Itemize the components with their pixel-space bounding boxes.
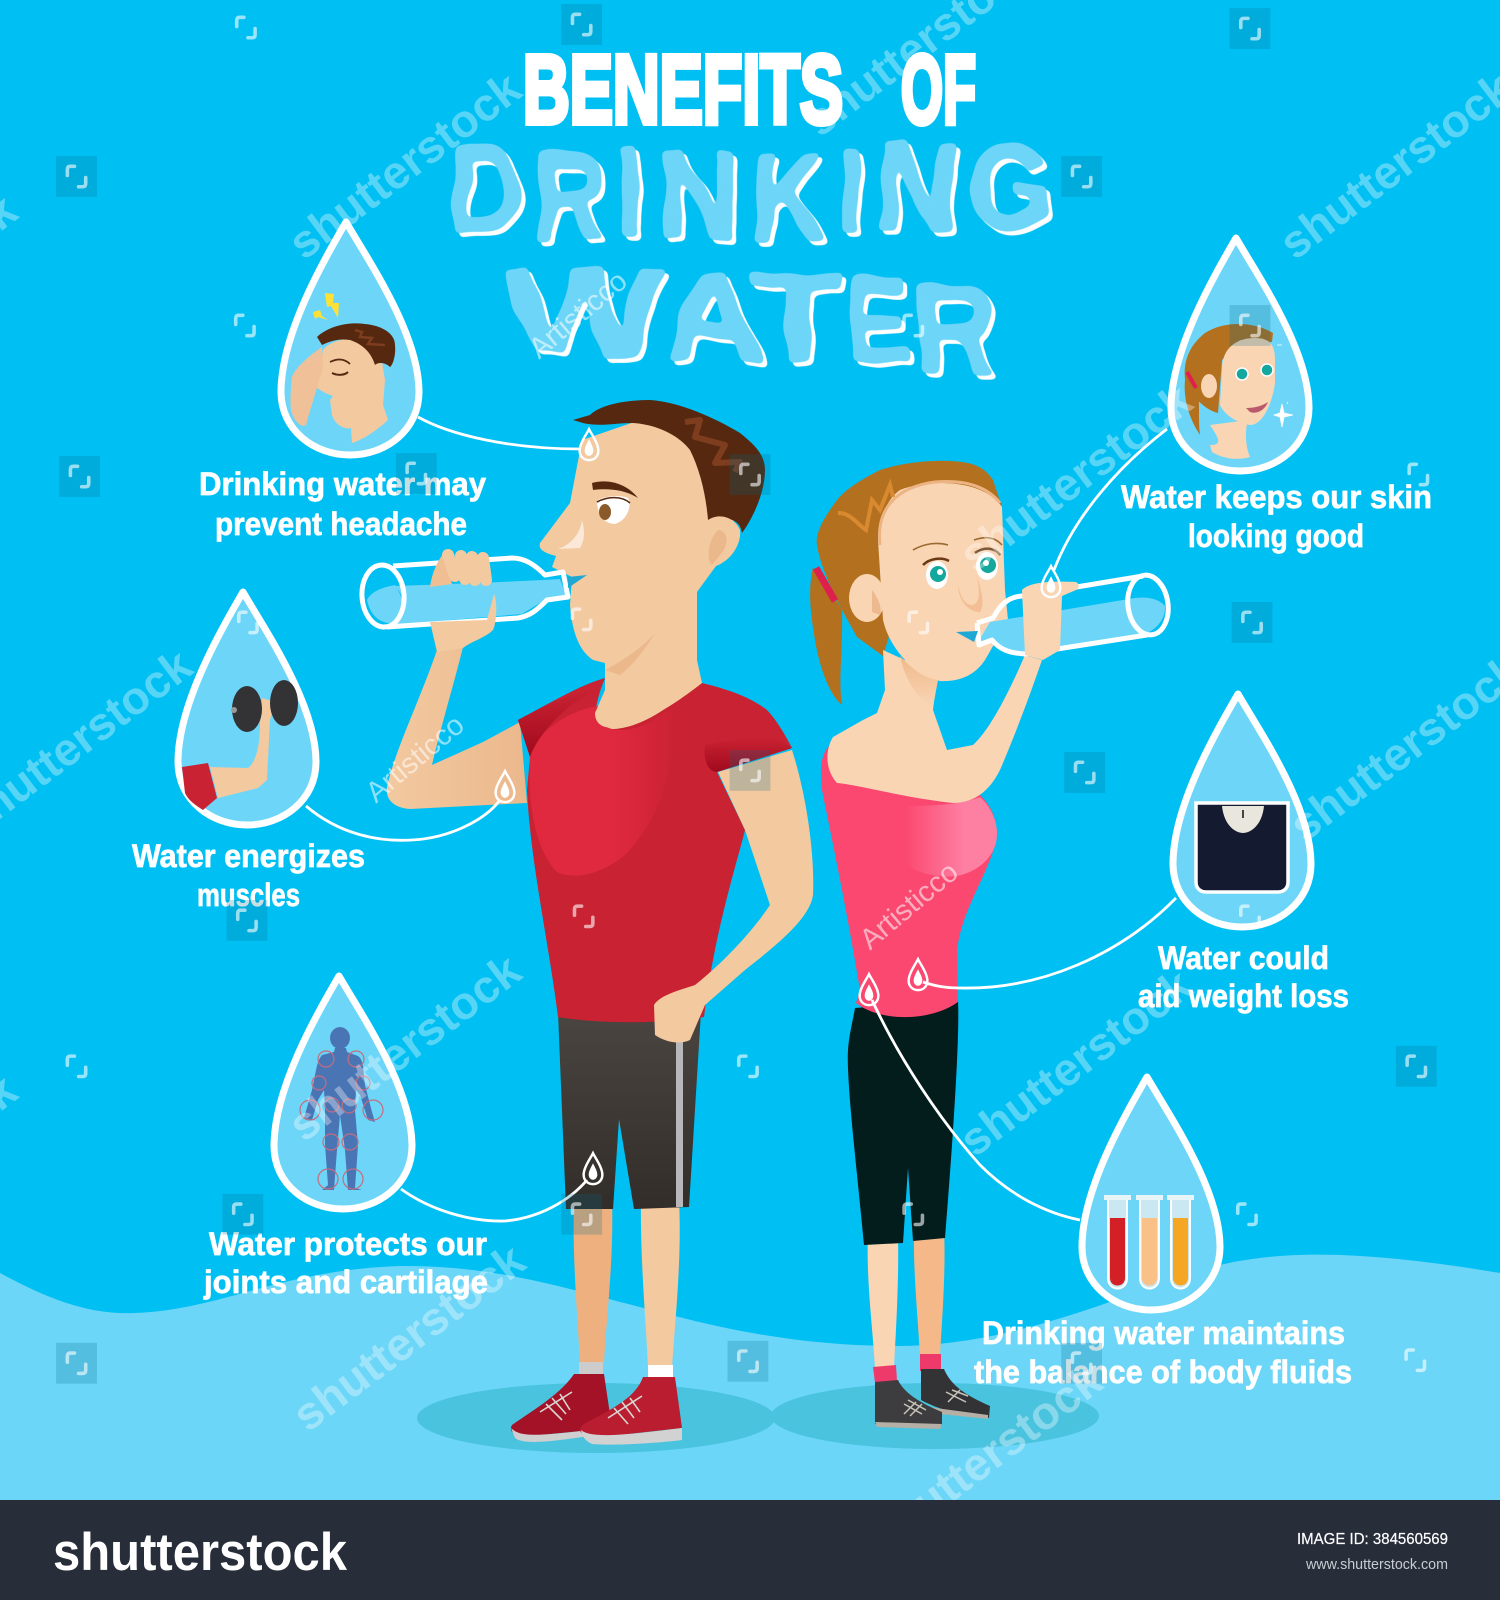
caption: muscles: Water energizes [132,838,365,874]
woman mouth water [956,631,978,642]
man shirt [518,678,792,1022]
icon: woman face [1185,324,1293,459]
caption: headache: Drinking water may [199,466,486,502]
man neck shade [605,633,655,675]
woman legs [868,1235,898,1368]
man ear [701,516,740,568]
woman top highlight [905,797,997,877]
caption: joints: Water protects our [209,1226,487,1262]
man raised arm [387,647,527,809]
man collar underlay [600,690,698,738]
woman hair [817,461,1002,656]
title: benefits of: BENEFITS [523,35,843,144]
caption: weight [1138,940,1349,1014]
connector: joints [401,1180,587,1221]
caption: headache: prevent headache [215,506,467,542]
watermarks: shutterstock [278,61,531,269]
watermarks: shutterstock [278,943,531,1151]
title: drinking water: D [448,120,522,259]
watermarks: Artisticco [360,709,471,809]
woman socks [873,1354,941,1383]
man head [540,420,735,728]
title: drinking water: N [874,118,960,257]
connector: headache [418,417,580,449]
watermarks: shutterstock [859,1353,1112,1561]
connector: skin [1054,429,1167,570]
woman hair highlight [838,485,893,530]
footer logo: shutterstock [53,1523,347,1582]
connector: fluids [872,1000,1080,1220]
connector: weight [923,898,1176,988]
title: drinking water: R [912,260,996,399]
watermarks: shutterstock [282,1233,535,1441]
man right arm [654,750,813,1042]
man hand [430,553,496,652]
title: drinking water: N [656,126,740,265]
woman neck shadow [900,656,938,707]
woman top [821,722,996,1017]
panel: muscles drop [178,592,316,825]
woman eyes [913,538,1002,589]
caption: muscles: muscles [197,877,300,913]
icon: head with headache [290,323,395,443]
man mouth water [568,575,587,588]
man nose highlight [558,520,584,549]
man shirt chest highlight [529,706,674,876]
woman figure [810,461,1172,1429]
man figure [360,400,813,1445]
footer url: www.shutterstock.com [1305,1556,1448,1573]
caption: fluids: Drinking water maintains [982,1315,1345,1351]
man legs [574,1200,612,1365]
man shoes [511,1374,682,1445]
title: drinking water: R [532,128,606,267]
watermarks: shutterstock [949,373,1202,581]
title: benefits of: OF [901,35,976,144]
title: drinking water: T [750,248,844,387]
watermarks: Artisticco [523,265,634,365]
man bottle [360,558,568,628]
icon: scale [1196,803,1288,892]
man left sleeve shade [518,690,596,757]
caption: weight: aid weight loss [1138,978,1349,1014]
title: drinking water: A [663,248,763,387]
woman hand [1022,582,1079,660]
ground wave [0,1255,1500,1500]
caption: joints: joints and cartilage [203,1264,488,1300]
woman hair band [816,568,835,601]
caption: fluids: the balance of body fluids [974,1354,1352,1390]
man right sleeve shade [705,738,792,772]
watermarks: shutterstock [949,958,1202,1166]
panel: fluids drop [1082,1077,1220,1310]
woman hairline [879,482,1000,545]
caption: joints [203,1226,488,1300]
man shorts stripe [676,1030,683,1207]
woman face [878,483,1008,681]
caption: headache [199,466,486,542]
caption: skin: looking good [1188,518,1364,554]
footer bar [0,1500,1500,1600]
man hair [573,400,765,533]
man hair highlight [685,420,740,472]
small drop markers [496,429,1060,1184]
caption: skin: Water keeps our skin [1121,479,1432,515]
man eye [592,481,638,524]
woman bottle [977,573,1172,654]
panel: weight drop [1173,694,1311,927]
man shorts [558,1012,701,1209]
connector: muscles [306,800,500,840]
ground shadows [417,1383,1099,1453]
caption: skin [1121,479,1432,554]
woman nose [958,575,983,612]
title: drinking water: I [838,123,864,262]
woman ear [849,574,885,622]
woman capris [848,1000,958,1245]
panel: joints drop [274,976,412,1209]
title: drinking water [448,118,1055,399]
title: drinking water: W [505,243,665,382]
title: drinking water: G [967,118,1055,257]
icon: test tubes [1104,1195,1194,1288]
watermarks: Artisticco [854,856,965,956]
panel: skin drop [1171,238,1309,471]
caption: fluids [974,1315,1352,1390]
title: drinking water: K [752,128,824,267]
icon: arm with dumbbell [182,680,298,810]
caption: weight: Water could [1158,940,1329,976]
footer image id: IMAGE ID: 384560569 [1297,1531,1448,1548]
woman torso and arm [827,650,1042,803]
title: drinking water: E [848,253,910,392]
icon: lightning [313,293,339,320]
woman ponytail [810,567,842,705]
man socks [579,1362,673,1378]
icon: body figure [300,1027,383,1190]
title: drinking water: I [615,120,642,259]
panel: headache drop [281,222,419,455]
caption: muscles [132,838,365,913]
woman shoes [875,1369,990,1429]
